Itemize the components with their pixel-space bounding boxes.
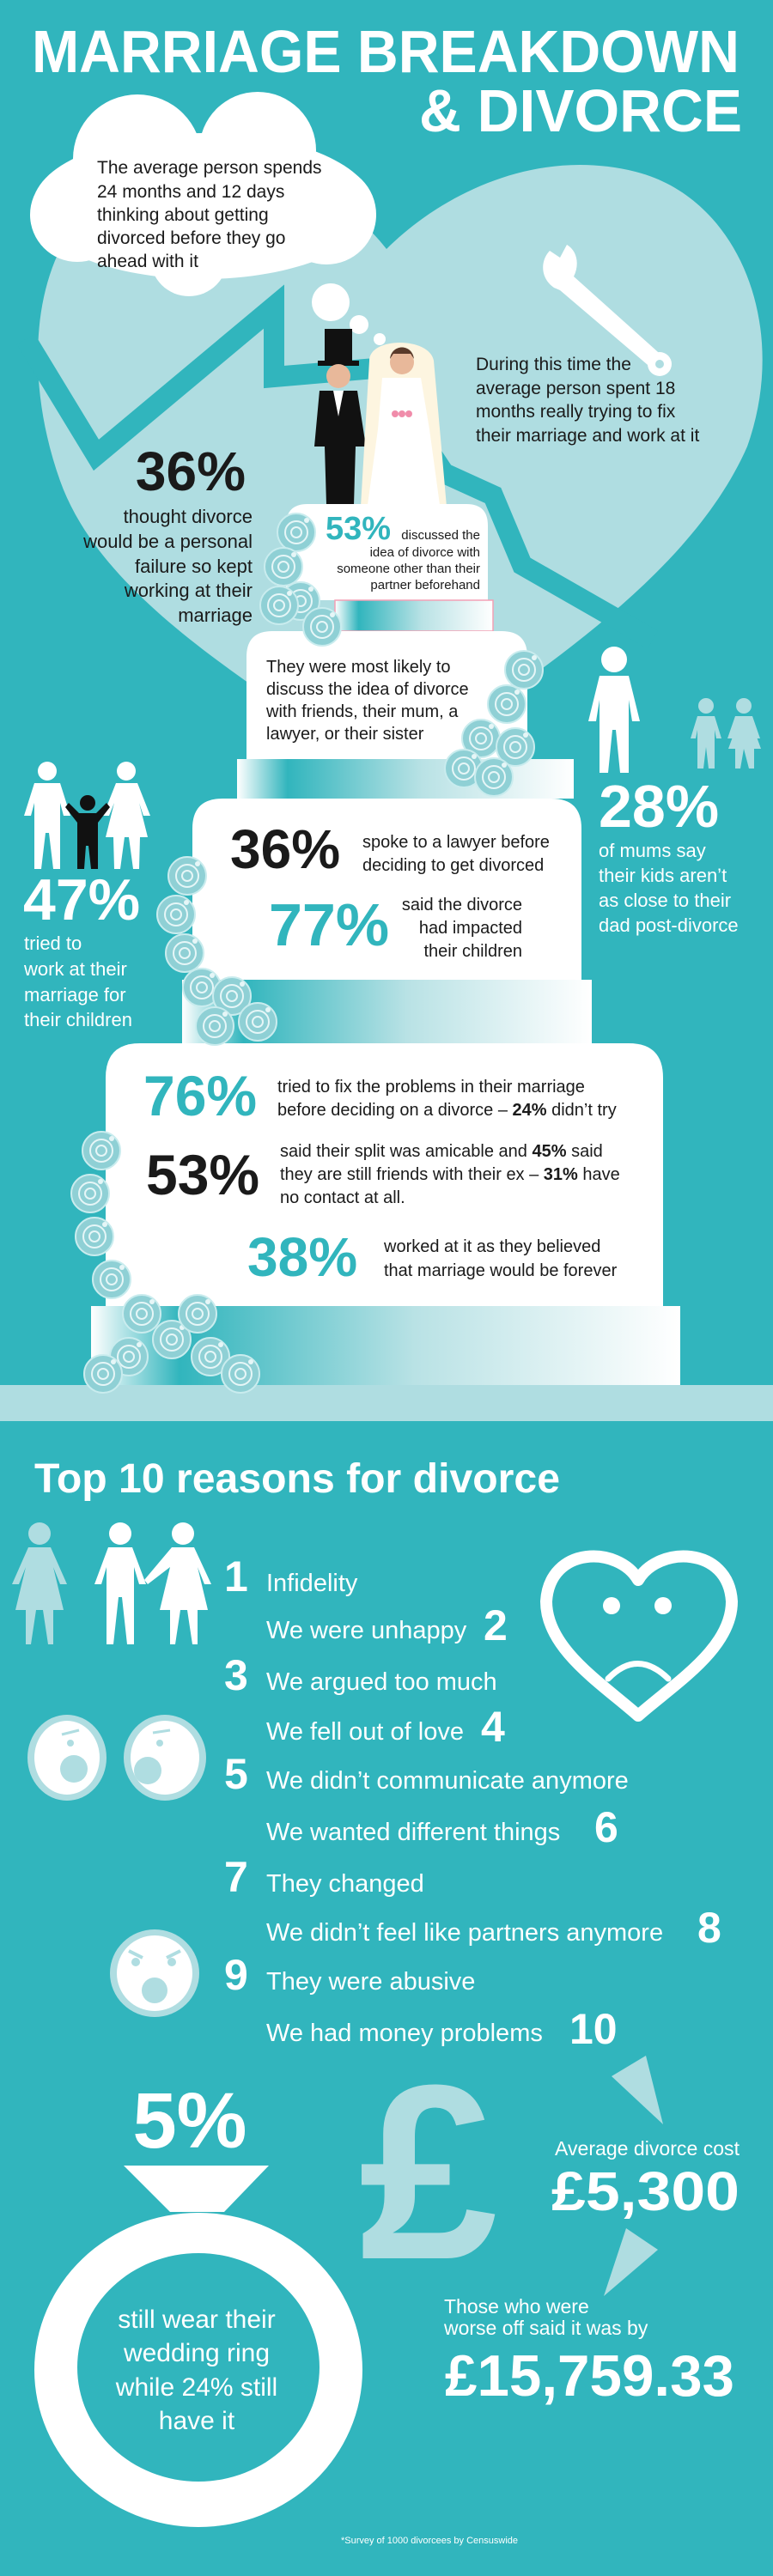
text: most likely to discuss <box>265 658 469 744</box>
stat: 36% personal failure: thought divorce <box>124 506 253 527</box>
stat: worse off <box>443 2295 734 2409</box>
list: reasons: 4 <box>481 1703 505 1751</box>
stat: 53% amicable: no contact at all. <box>280 1188 405 1207</box>
stat: 53% discussed: partner beforehand <box>370 578 480 592</box>
stat: 28%: dad post-divorce <box>599 914 739 936</box>
stat: 28%: as close to their <box>599 890 731 911</box>
stat: 38% forever: worked at it as they believed <box>383 1237 600 1256</box>
stat: 5% ring <box>34 2077 362 2527</box>
stat: 47%: marriage for <box>24 984 126 1005</box>
stat: 36% personal failure: would be a personal <box>82 531 253 552</box>
stat: 47%: tried to <box>24 933 82 954</box>
title: MARRIAGE BREAKDOWN <box>32 18 740 85</box>
stat: 36% personal failure: marriage <box>178 605 253 626</box>
stat: 77% children: their children <box>423 942 522 961</box>
text: during this time: During this time the <box>476 355 631 374</box>
stat: 47%: their children <box>24 1009 132 1030</box>
stat: worse off: £15,759.33 <box>445 2343 734 2409</box>
list: reasons: We wanted different things <box>266 1819 560 1846</box>
list: reasons: 10 <box>569 2005 618 2053</box>
list: reasons: 2 <box>484 1601 508 1649</box>
cloud: thinking time: divorced before they go <box>97 228 285 248</box>
cake tiers <box>0 504 773 1421</box>
stat: 28%: of mums say <box>599 840 706 861</box>
text: during this time <box>476 355 699 446</box>
stat: average cost: Average divorce cost <box>555 2137 740 2160</box>
arrows <box>604 2056 663 2296</box>
stat: 5% ring: wedding ring <box>123 2339 270 2367</box>
list: reasons: We were unhappy <box>266 1617 467 1644</box>
stat: 47%: 47% <box>23 867 140 933</box>
icon: wrench <box>543 245 672 376</box>
stat: 53% discussed <box>326 511 480 592</box>
stat: 38% forever <box>247 1226 618 1288</box>
stat: 53% amicable: they are still friends with their ex – 31% have <box>280 1165 620 1184</box>
text: most likely to discuss: with friends, their mum, a <box>265 702 459 721</box>
stat: 53% discussed: someone other than their <box>337 562 480 576</box>
stat: 77% children: 77% <box>269 891 389 958</box>
crack <box>26 307 653 640</box>
stat: 47% <box>23 867 140 1030</box>
icon: angry faces <box>27 1715 206 2017</box>
stat: average cost: £5,300 <box>551 2160 740 2222</box>
stat: 36% personal failure <box>82 440 253 626</box>
cloud: thinking time: thinking about getting <box>97 205 269 225</box>
stat: 28%: their kids aren’t <box>599 865 727 886</box>
text: most likely to discuss: They were most likely to <box>266 658 451 677</box>
list: reasons <box>224 1552 721 2053</box>
stat: 53% amicable <box>146 1142 620 1207</box>
heart background <box>38 165 763 777</box>
stat: 76% tried to fix: 76% <box>143 1064 257 1127</box>
stat: 53% amicable: said their split was amicable and 45% said <box>280 1142 603 1161</box>
list: reasons: We had money problems <box>266 2020 543 2047</box>
stat: 77% children: had impacted <box>419 919 522 938</box>
footnote: *Survey of 1000 divorcees by Censuswide <box>341 2536 518 2546</box>
stat: 5% ring: still wear their <box>118 2306 276 2334</box>
stat: average cost <box>551 2137 740 2222</box>
text: during this time: average person spent 18 <box>476 379 675 398</box>
stat: 53% amicable: 53% <box>146 1143 259 1206</box>
stat: 53% discussed: idea of divorce with <box>370 545 480 560</box>
icon: people <box>12 1522 211 1644</box>
cloud: thinking time: 24 months and 12 days <box>97 182 284 202</box>
stat: 5% ring: 5% <box>133 2077 247 2165</box>
cloud: thinking time <box>30 92 376 296</box>
icon: family <box>24 762 150 869</box>
stat: 36% lawyer: 36% <box>230 818 340 880</box>
stat: 36% personal failure: working at their <box>124 580 253 601</box>
stat: worse off: Those who were <box>444 2295 589 2318</box>
list: reasons: 6 <box>594 1803 618 1851</box>
stat: 36% lawyer: spoke to a lawyer before <box>362 833 550 852</box>
stat: 36% personal failure: 36% <box>136 440 246 502</box>
title: & DIVORCE <box>419 77 742 144</box>
text: during this time: their marriage and work at it <box>476 426 699 446</box>
stat: worse off: worse off said it was by <box>443 2317 648 2339</box>
list: reasons: 3 <box>224 1651 248 1699</box>
text: during this time: months really trying to fix <box>476 402 676 422</box>
list: reasons: 1 <box>224 1552 248 1601</box>
text: most likely to discuss: lawyer, or their sister <box>266 725 424 744</box>
stat: 38% forever: that marriage would be forever <box>384 1261 618 1280</box>
stat: 53% discussed: 53% <box>326 511 391 547</box>
stat: 38% forever: 38% <box>247 1226 357 1288</box>
list: reasons: 9 <box>224 1951 248 1999</box>
list: reasons: We didn’t communicate anymore <box>266 1767 629 1795</box>
list: reasons: 5 <box>224 1750 248 1798</box>
stat: 77% children: said the divorce <box>402 896 522 914</box>
heading: top 10 reasons: Top 10 reasons for divorce <box>34 1456 560 1502</box>
icon: groom and bride <box>314 329 447 507</box>
text: most likely to discuss: discuss the idea of divorce <box>266 680 469 699</box>
list: reasons: We argued too much <box>266 1668 497 1696</box>
thought bubbles <box>312 283 386 345</box>
stat: 76% tried to fix: before deciding on a divorce – 24% didn’t try <box>277 1101 617 1120</box>
stat: 76% tried to fix <box>143 1064 617 1127</box>
stat: 28%: 28% <box>599 773 719 840</box>
icon: pound sign: £ <box>359 2033 497 2312</box>
list: reasons: 8 <box>697 1904 721 1952</box>
stat: 36% lawyer <box>230 818 550 880</box>
stat: 47%: work at their <box>23 958 127 980</box>
list: reasons: Infidelity <box>266 1570 358 1597</box>
cloud: thinking time: The average person spends <box>97 158 322 178</box>
list: reasons: We fell out of love <box>266 1718 464 1746</box>
list: reasons: We didn’t feel like partners anymore <box>266 1919 663 1947</box>
list: reasons: 7 <box>224 1853 248 1901</box>
list: reasons: They changed <box>266 1870 424 1898</box>
stat: 5% ring: have it <box>159 2407 235 2435</box>
stat: 76% tried to fix: tried to fix the problems in their marriage <box>277 1078 585 1097</box>
stat: 5% ring: while 24% still <box>115 2373 277 2402</box>
stat: 28% <box>599 773 739 936</box>
stat: 53% discussed: discussed the <box>401 528 480 543</box>
title <box>32 18 742 144</box>
cloud: thinking time: ahead with it <box>97 252 198 271</box>
stat: 77% children <box>269 891 522 961</box>
list: reasons: They were abusive <box>266 1968 475 1996</box>
stat: 36% lawyer: deciding to get divorced <box>362 856 544 875</box>
stat: 36% personal failure: failure so kept <box>135 556 253 577</box>
icon: sad heart <box>546 1557 732 1716</box>
roses decoration <box>71 513 543 1393</box>
icon: mum and kids <box>588 647 761 773</box>
